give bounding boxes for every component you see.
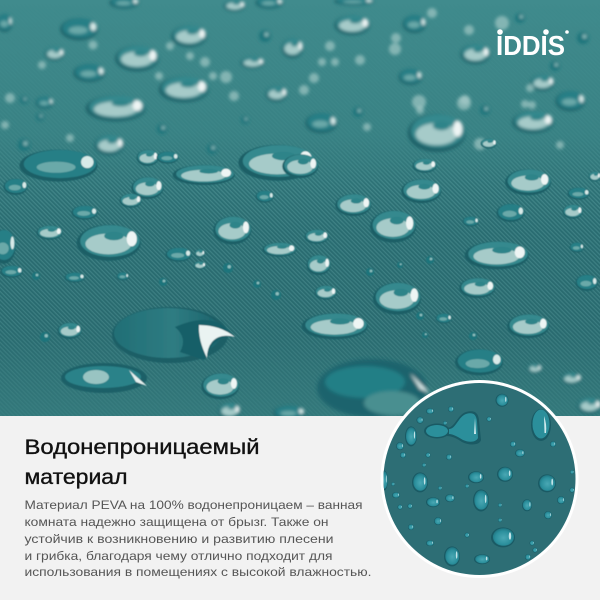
blurred droplets, far zone — [0, 0, 589, 155]
panel: text background — [0, 416, 600, 600]
heading: материал — [24, 466, 128, 489]
large blurred droplet, lower left — [61, 363, 147, 393]
droplet, right of centre — [455, 349, 503, 375]
heading — [24, 436, 260, 489]
heading: Водонепроницаемый — [24, 436, 260, 459]
photo: water droplets on teal fabric — [0, 0, 600, 420]
large blurred droplet, bottom centre — [317, 359, 430, 417]
body text: использования в помещениях с высокой влажностью. — [24, 565, 372, 579]
body text: Материал PEVA на 100% водонепроницаем – ванная — [24, 498, 362, 512]
circle inset: droplets close-up — [380, 380, 578, 578]
body text: комната надежно защищена от брызг. Также он — [24, 515, 328, 529]
body text: устойчив к возникновению и развитию плесени — [24, 532, 334, 546]
body text — [24, 498, 372, 579]
body text: и грибка, благодаря чему отлично подходит для — [24, 549, 332, 563]
droplets, middle zone — [0, 138, 600, 342]
big foreground droplet, left — [112, 307, 235, 363]
droplet, lower centre — [201, 373, 239, 399]
logo: IDDIS: IDDIS — [496, 30, 565, 61]
bottom-edge droplets — [219, 364, 600, 420]
